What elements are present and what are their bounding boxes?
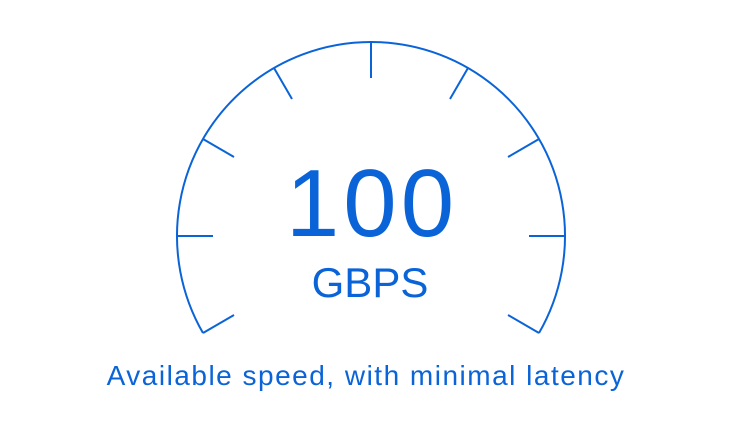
gauge arc — [177, 42, 565, 333]
value 100: 100 — [286, 150, 458, 257]
unit GBPS: GBPS — [312, 259, 428, 306]
caption: Available speed, with minimal latency — [107, 360, 625, 391]
gauge ticks — [177, 42, 565, 333]
